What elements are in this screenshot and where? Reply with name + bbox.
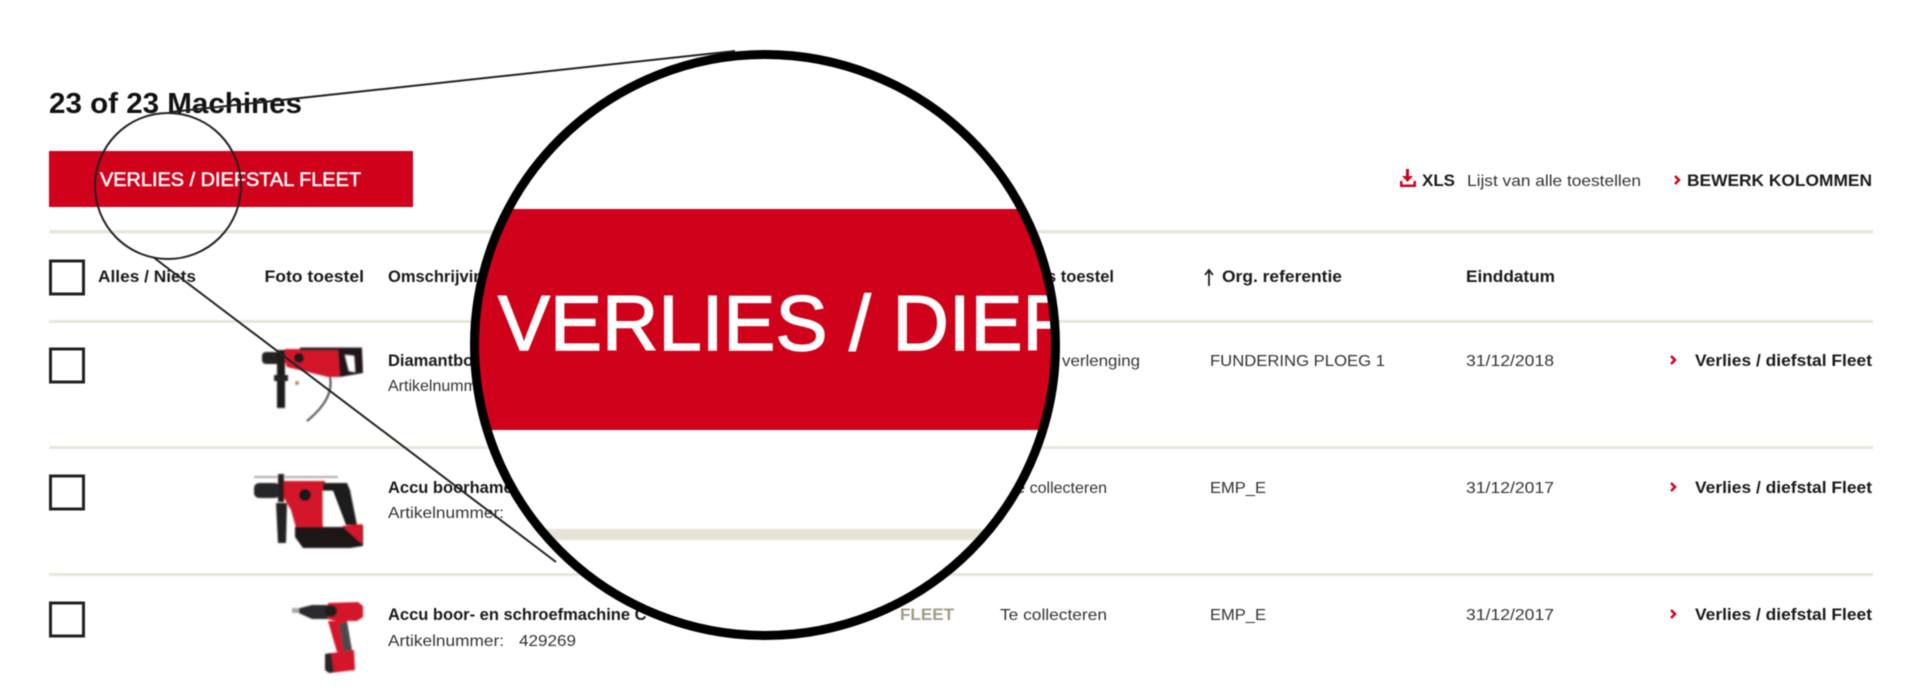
article number value: 429269	[519, 633, 576, 650]
header: org. referentie: Org. referentie	[1222, 268, 1342, 286]
tool photo: cordless hammer drill	[254, 474, 363, 548]
org reference: EMP_E	[1210, 607, 1266, 624]
xls label: XLS	[1422, 172, 1455, 190]
icon: chevron	[1671, 610, 1675, 618]
end date: 31/12/2017	[1466, 480, 1554, 497]
icon: chevron	[1675, 176, 1679, 184]
enlarged divider	[546, 528, 984, 540]
tool photo: cordless drill driver	[292, 602, 363, 673]
table row dividers	[49, 230, 1873, 576]
org reference: FUNDERING PLOEG 1	[1210, 353, 1385, 370]
org reference: EMP_E	[1210, 480, 1266, 497]
badge: fleet: FLEET	[900, 606, 954, 624]
header: status toestel: Status toestel	[1006, 268, 1114, 286]
header: foto toestel: Foto toestel	[264, 268, 364, 286]
checkbox	[50, 476, 84, 509]
header: omschrijving: Omschrijving	[388, 268, 493, 286]
all machines list text: Lijst van alle toestellen	[1467, 173, 1641, 190]
row 2	[50, 474, 1873, 548]
description: Accu boor- en schroefmachine C	[388, 606, 647, 624]
status: Te collecteren	[1000, 607, 1107, 624]
status: verlenging	[1062, 353, 1140, 370]
icon: chevron	[1671, 356, 1675, 364]
description: Diamantboormachine	[388, 352, 557, 370]
end date: 31/12/2017	[1466, 607, 1554, 624]
status: Te collecteren	[1008, 480, 1107, 497]
enlarged button text: VERLIES / DIEFSTAL FLEET	[498, 279, 1521, 367]
description: Accu boorhamer	[388, 479, 520, 497]
action link: Verlies / diefstal Fleet	[1695, 479, 1873, 497]
toolbar: export and edit columns	[1400, 169, 1872, 190]
button: verlies / diefstal fleet: VERLIES / DIEFSTAL FLEET	[100, 170, 361, 191]
table header	[50, 261, 1555, 294]
article number: Artikelnummer:	[388, 378, 496, 395]
article number: Artikelnummer:	[388, 633, 504, 650]
icon: xls download	[1400, 169, 1416, 187]
action link: Verlies / diefstal Fleet	[1695, 352, 1873, 370]
row 3	[50, 602, 1873, 673]
magnifier: small focus circle and connector lines	[95, 51, 735, 562]
article number: Artikelnummer:	[388, 505, 504, 522]
edit columns link: BEWERK KOLOMMEN	[1687, 172, 1872, 190]
title: 23 of 23 Machines	[49, 88, 302, 120]
enlarged red button band	[478, 208, 1052, 431]
icon: chevron	[1671, 483, 1675, 491]
end date: 31/12/2018	[1466, 353, 1554, 370]
lens ring	[474, 54, 1056, 636]
checkbox	[50, 603, 84, 636]
header: alles / niets: Alles / Niets	[98, 268, 196, 286]
checkbox: select all	[50, 261, 84, 294]
action link: Verlies / diefstal Fleet	[1695, 606, 1873, 624]
header: einddatum: Einddatum	[1466, 268, 1555, 286]
row 1	[50, 348, 1873, 421]
magnifier: enlarged lens	[469, 49, 1061, 641]
tool photo: diamond drill	[262, 348, 363, 421]
button: verlies / diefstal fleet	[49, 151, 413, 207]
checkbox	[50, 349, 84, 382]
icon: sort arrow	[1205, 270, 1213, 286]
